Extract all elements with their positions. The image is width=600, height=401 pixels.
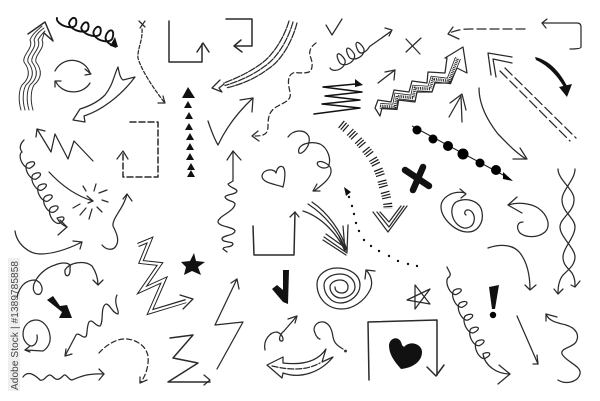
corner return arrow bbox=[226, 19, 252, 52]
check swoosh arrow bbox=[208, 98, 253, 145]
outline heart bbox=[262, 166, 285, 187]
loop down arrow bbox=[288, 131, 331, 191]
fancy curved arrow bbox=[267, 349, 333, 378]
tangled spiral arrow bbox=[441, 189, 482, 232]
small spiral arrow bbox=[23, 320, 50, 352]
x mark small bbox=[406, 38, 421, 54]
box with heart and arrow bbox=[368, 320, 444, 380]
looped curve arrow bbox=[17, 263, 103, 297]
dashed box arrow bbox=[117, 122, 158, 177]
small loop arrow bbox=[265, 316, 297, 350]
feathered multi-line arrow bbox=[303, 202, 348, 255]
dashed left arrow bbox=[448, 27, 525, 39]
coil arrow left bbox=[18, 140, 67, 235]
triangle column arrow bbox=[182, 87, 195, 177]
s-curve arrow bbox=[546, 314, 580, 382]
spiral arrow bbox=[317, 268, 375, 309]
dashed arrow with x start bbox=[138, 21, 165, 103]
black heart bbox=[389, 338, 422, 369]
double line zigzag arrow bbox=[138, 240, 193, 312]
straight arrow bbox=[517, 316, 538, 364]
exclamation mark bbox=[489, 285, 499, 318]
ticked band arrow bbox=[341, 124, 407, 232]
hook with dot bbox=[314, 322, 346, 352]
right corner arrow bbox=[542, 19, 581, 49]
lightning arrow bbox=[215, 279, 243, 369]
thick curved arrow bbox=[535, 57, 572, 97]
coil arrow lower right bbox=[444, 267, 510, 384]
circular arrows bbox=[55, 60, 91, 92]
black check bbox=[272, 270, 289, 304]
outline star bbox=[407, 285, 430, 309]
curved swoosh arrow bbox=[15, 231, 82, 254]
wave arrow diagonal bbox=[65, 295, 118, 356]
loop arrow bbox=[326, 25, 394, 73]
zigzag striped arrow bbox=[375, 47, 467, 116]
hook arrow bbox=[508, 197, 548, 237]
black x bbox=[405, 167, 429, 190]
wavy up arrow bbox=[218, 151, 241, 252]
double dashed arrow bbox=[488, 53, 576, 141]
dotted arrow bbox=[344, 187, 418, 267]
small arrow bbox=[378, 70, 395, 83]
scribble arrow bbox=[314, 79, 363, 114]
Z arrow bbox=[168, 335, 210, 385]
dashed arc arrow bbox=[99, 339, 148, 383]
dashed wiggle arrow bbox=[252, 43, 316, 141]
small double line arrow bbox=[449, 94, 466, 122]
bottom wave arrow bbox=[23, 369, 104, 380]
coil arrow thick bbox=[55, 11, 120, 47]
arrow into burst bbox=[49, 172, 108, 219]
check mark bbox=[326, 19, 342, 35]
stock id strip: Adobe Stock | #1389785858 bbox=[10, 261, 21, 390]
curved down arrow bbox=[488, 245, 536, 290]
box up arrow bbox=[253, 212, 299, 255]
beaded arrow bbox=[412, 126, 513, 181]
long curved arrow bbox=[479, 88, 527, 159]
curved dashed band arrow bbox=[212, 21, 297, 92]
thick black arrow bbox=[47, 296, 72, 318]
black star bbox=[181, 253, 205, 275]
zigzag arrow bbox=[36, 129, 93, 161]
L shape arrow bbox=[169, 21, 209, 62]
fish-tail arrow bbox=[73, 67, 135, 122]
s arrow bbox=[102, 194, 132, 249]
wavy multi-line arrow bbox=[19, 22, 53, 110]
twisted rope arrows bbox=[554, 169, 580, 294]
